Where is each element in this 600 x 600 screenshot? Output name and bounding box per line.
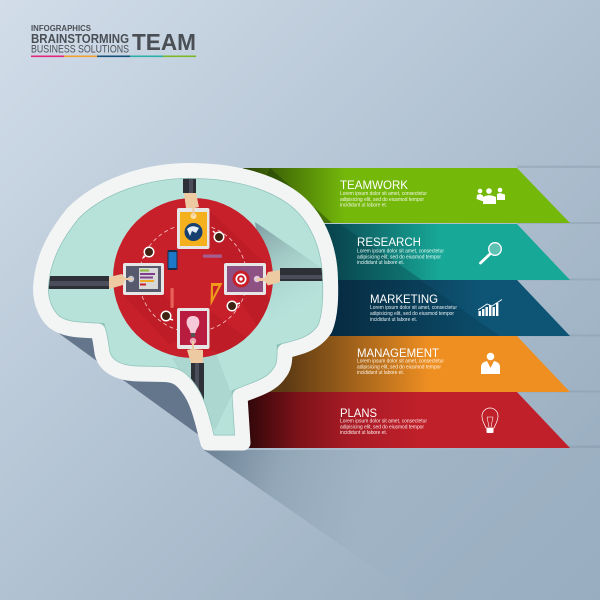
round table (109, 193, 285, 363)
ribbon edge shadows (517, 166, 600, 448)
arm: left (46, 276, 109, 289)
marketing body (370, 305, 457, 323)
header: brainstorming: BRAINSTORMING (31, 31, 129, 46)
marketing heading: MARKETING (370, 292, 438, 306)
dark cast shadow of brain (57, 332, 220, 438)
teamwork body: incididunt ut labore et. (340, 202, 387, 208)
header: team: TEAM (132, 29, 196, 55)
brain fill (41, 170, 331, 443)
tablet: bottom (177, 308, 210, 349)
management body: adipisicing elit, sed do eiusmod tempor (357, 364, 441, 370)
plans body: incididunt ut labore et. (340, 430, 387, 436)
tablet: right (224, 263, 266, 295)
icon: magnifier (480, 243, 501, 263)
arm: right (280, 268, 325, 281)
hand: top (184, 193, 199, 216)
teamwork body (340, 191, 427, 208)
research body (357, 248, 444, 266)
pen: purple (203, 254, 222, 258)
cup: upper right (213, 231, 224, 242)
research body: Lorem ipsum dolor sit amet, consectetur (357, 248, 444, 254)
ribbon: teamwork (243, 168, 570, 223)
cup: upper left (143, 246, 154, 258)
plans body: adipisicing elit, sed do eiusmod tempor (340, 424, 424, 430)
icon: light bulb (482, 408, 498, 433)
ribbon: plans (243, 392, 570, 448)
research heading: RESEARCH (357, 235, 421, 249)
phone (168, 250, 178, 270)
table top (113, 198, 273, 358)
long shadow on background below brain (204, 450, 600, 600)
management heading: MANAGEMENT (357, 346, 439, 360)
ribbon: research (243, 224, 570, 280)
teamwork body: Lorem ipsum dolor sit amet, consectetur (340, 191, 427, 197)
pen: red (170, 288, 174, 308)
arm: top (183, 172, 196, 193)
tablet: left (123, 263, 164, 295)
teamwork body: adipisicing elit, sed do eiusmod tempor (340, 197, 424, 203)
ruler (210, 283, 222, 306)
plans heading: PLANS (340, 406, 377, 420)
brain (41, 170, 331, 443)
icon: chart (478, 300, 502, 316)
header (31, 23, 196, 57)
hand: left (109, 274, 132, 289)
table shadows (124, 211, 270, 354)
marketing body: incididunt ut labore et. (370, 317, 417, 323)
header: infographics: INFOGRAPHICS (31, 23, 91, 33)
management body: incididunt ut labore et. (357, 370, 404, 376)
cup: lower right (226, 300, 240, 312)
marketing body: Lorem ipsum dolor sit amet, consectetur (370, 305, 457, 311)
brain inner edge (48, 178, 324, 436)
brain outline (41, 170, 331, 443)
ribbon: marketing (243, 280, 570, 336)
icon: people (476, 188, 505, 204)
header: colour rule (31, 56, 196, 57)
icon: manager (481, 353, 500, 374)
dashed ring (139, 224, 247, 332)
marketing body: adipisicing elit, sed do eiusmod tempor (370, 311, 454, 317)
arm: bottom (191, 363, 204, 410)
ribbon: management (243, 336, 570, 392)
management body (357, 358, 444, 376)
teamwork heading: TEAMWORK (340, 178, 408, 192)
plans body (340, 418, 427, 436)
table long shadow (172, 222, 326, 430)
tablet: top (177, 208, 210, 249)
research body: adipisicing elit, sed do eiusmod tempor (357, 254, 441, 260)
header: business solutions: BUSINESS SOLUTIONS (31, 44, 129, 56)
plans body: Lorem ipsum dolor sit amet, consectetur (340, 418, 427, 424)
research body: incididunt ut labore et. (357, 260, 404, 266)
cup: lower left (160, 310, 173, 322)
management body: Lorem ipsum dolor sit amet, consectetur (357, 358, 444, 364)
hand: bottom (187, 341, 203, 363)
hand: right (257, 270, 280, 286)
